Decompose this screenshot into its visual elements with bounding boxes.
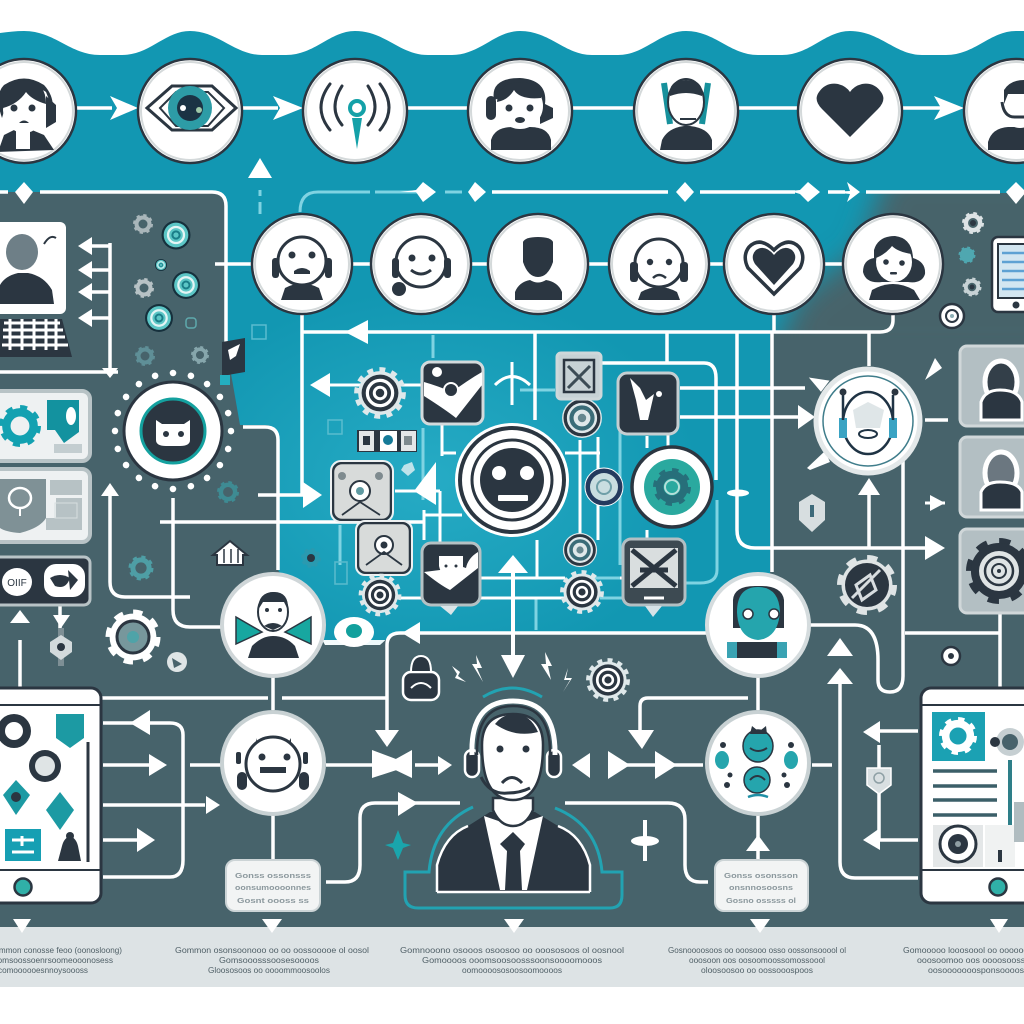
left panel: cluster of swirl icons xyxy=(135,216,245,385)
top row node: man with mic xyxy=(964,59,1024,163)
teal outline behind agent xyxy=(405,807,622,908)
second row node: silhouette xyxy=(488,214,588,314)
lighter centre glow xyxy=(160,290,700,670)
central tile: camera A xyxy=(331,461,393,522)
teal blob beside node xyxy=(334,617,374,647)
caption: column three: Gomnooono osooos osoosoo oo ooososoos ol oosnool xyxy=(400,945,624,955)
caption: column one xyxy=(0,945,122,975)
small gears and house icons xyxy=(131,325,347,584)
small hexagon lock xyxy=(799,494,825,532)
teal small sparkle xyxy=(385,830,411,860)
central tile: dark map xyxy=(618,373,678,434)
caption: column three xyxy=(400,945,624,975)
top row node: eye xyxy=(138,59,242,163)
down markers above caption band xyxy=(13,919,1008,933)
teal robot node xyxy=(707,574,809,676)
bottom caption band xyxy=(0,927,1024,987)
top row node: broadcast signal xyxy=(303,59,407,163)
connector lines xyxy=(0,108,1000,882)
central tile: photo A xyxy=(422,362,483,424)
central tile: photo B xyxy=(422,543,480,615)
caption box left: oonsumoooonnes xyxy=(235,883,311,892)
second row node: woman xyxy=(843,214,943,314)
top row node: agent with headset xyxy=(468,59,572,163)
lock icon and bolts above agent xyxy=(403,652,628,700)
caption: column two: Gomsooosssoosesoooos xyxy=(219,955,319,965)
caption: column five xyxy=(903,945,1024,975)
caption: column one: comoooooesnnoysoooss xyxy=(0,965,88,975)
central spiral tile group left xyxy=(357,370,417,476)
node: spiky smiley xyxy=(222,712,324,814)
right top gear cluster xyxy=(960,214,982,295)
head and headset xyxy=(465,750,479,777)
second row node: outlined heart xyxy=(724,214,824,314)
caption box right xyxy=(715,860,808,911)
robot node with antenna headset xyxy=(816,369,920,473)
caption box left: Gonss ossonsss xyxy=(235,871,311,880)
caption: column two: Gommon osonsoonooo oo oo oossooooe ol oosol xyxy=(175,945,369,955)
tablet article content xyxy=(932,712,1024,867)
left panel: toggle card xyxy=(0,557,90,605)
caption: column four xyxy=(668,945,846,975)
second row node: smiling agent with mic xyxy=(371,214,471,314)
caption: column four: Gosnoooosoos oo ooosooo osso oossonsooool ol xyxy=(668,945,846,955)
neck and collar xyxy=(493,798,533,826)
wavy teal band xyxy=(0,31,1024,640)
slate top right fade xyxy=(770,193,1024,333)
caption: column four: ooosoon oos oosoomoossomossoool xyxy=(689,955,825,965)
caption box right: onsnnosoosns xyxy=(729,883,793,892)
caption: column two: Gloososoos oo oooommoosoolos xyxy=(208,965,330,975)
caption: column two xyxy=(175,945,369,975)
central tile: camera B xyxy=(356,521,412,575)
small target icons xyxy=(940,304,964,665)
caption: column three: Gomoooos ooomsoosoosssoonsoooomooos xyxy=(422,955,602,965)
slate background panels xyxy=(0,192,1024,927)
central agent illustration xyxy=(405,688,622,908)
small swirl node xyxy=(585,468,623,506)
left panel: shield card xyxy=(0,469,90,542)
caption box left xyxy=(226,860,320,911)
dark badge gear xyxy=(843,561,891,609)
small shield pendant xyxy=(867,768,891,794)
caption box right: Gosno osssss ol xyxy=(726,896,796,905)
second row node: worried agent xyxy=(252,214,352,314)
right panel: profile cards and gear xyxy=(960,346,1024,613)
suit xyxy=(437,812,590,892)
central gear badges xyxy=(361,398,602,614)
central tile: cross box xyxy=(557,353,601,399)
caption: column five: oosooooooosponsoooos xyxy=(928,965,1024,975)
right top tablet xyxy=(992,237,1024,312)
left panel: toggle card: OIIF xyxy=(7,578,27,589)
second row node: sad agent xyxy=(609,214,709,314)
node: teal faces cluster xyxy=(707,712,809,814)
gear node with dotted halo xyxy=(115,373,231,489)
flow diamonds and sparks xyxy=(15,182,1024,861)
top row node: woman with headset xyxy=(0,59,76,163)
left panel: laptop card xyxy=(0,222,72,357)
central hub face xyxy=(455,423,569,537)
top row node: heart xyxy=(798,59,902,163)
tablet app icons xyxy=(0,714,88,862)
right tablet xyxy=(921,688,1024,903)
caption: column three: oomoooososoosoomoooos xyxy=(462,965,562,975)
left panel: gear settings card xyxy=(0,391,90,461)
caption box right: Gonss osonsson xyxy=(724,871,799,880)
caption box left: Gosnt oooss ss xyxy=(237,896,309,905)
teal gear node xyxy=(632,447,712,527)
central grid lines xyxy=(330,362,668,598)
caption: column four: oloosoosoo oo oossooospoos xyxy=(701,965,813,975)
light centre connectors xyxy=(260,190,717,630)
left tablet xyxy=(0,688,101,903)
node: man with bow tie xyxy=(222,574,324,676)
top row node: bearded agent xyxy=(634,59,738,163)
central tile: monitor xyxy=(623,539,685,617)
flow arrowheads xyxy=(10,96,964,852)
large gear and pin icon xyxy=(50,615,187,672)
